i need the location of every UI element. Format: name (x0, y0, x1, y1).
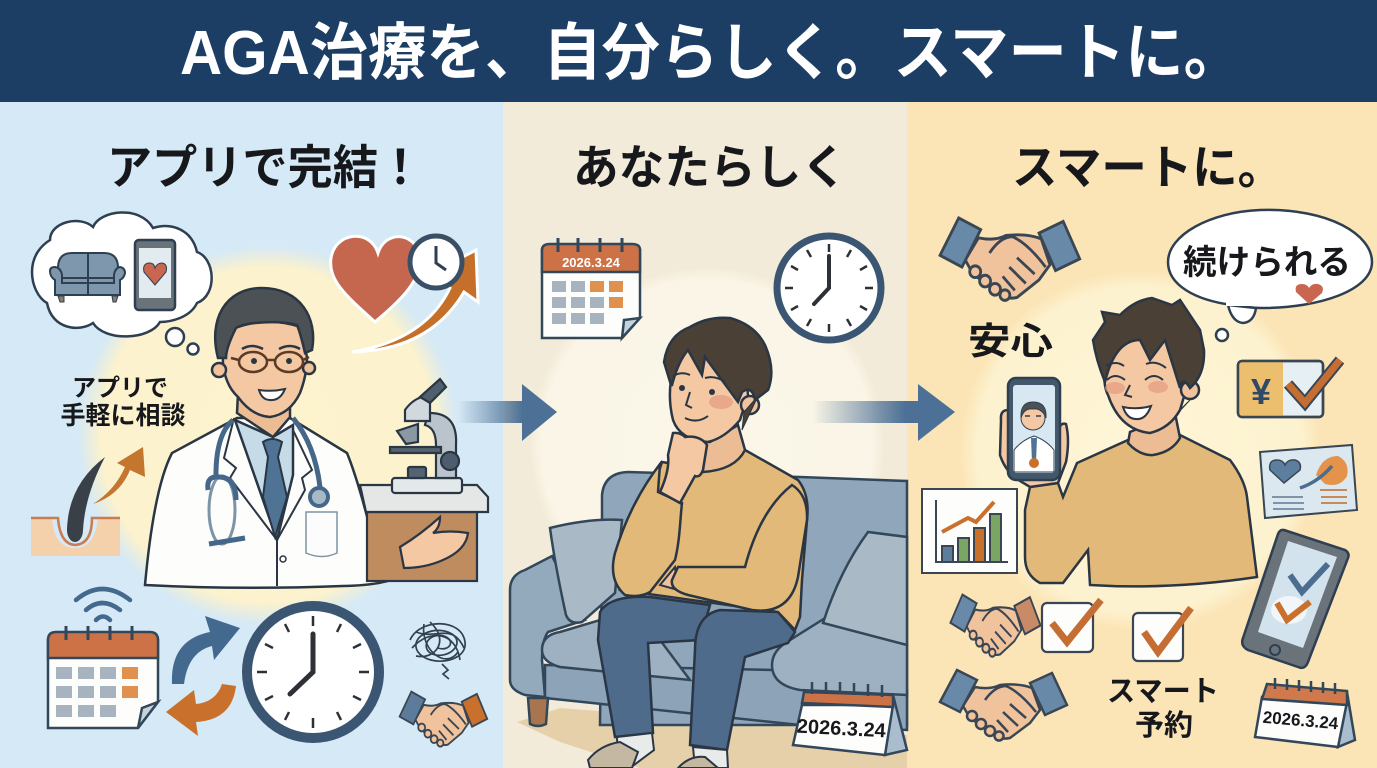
neck (680, 425, 745, 472)
icon: microscope on desk (360, 379, 488, 581)
sweater (620, 450, 808, 630)
shirt (235, 420, 293, 540)
face (1104, 330, 1195, 433)
coat (145, 418, 410, 588)
title banner: AGA治療を、自分らしく。スマートに。 (180, 19, 1242, 88)
hair (215, 288, 313, 358)
icon: calendar middle (542, 238, 640, 338)
socks and slippers (617, 733, 654, 768)
label: smart booking: 予約 (1135, 709, 1193, 742)
label: smart booking (1107, 676, 1219, 742)
icon: lower handshake (940, 670, 1067, 740)
icon: tangled scribble (410, 622, 465, 679)
callout: can continue (1168, 210, 1372, 341)
figure: smiling man with phone (1000, 298, 1257, 586)
icon: heart with clock and rising arrow (331, 236, 478, 352)
icon: calendar middle: 2026.3.24 (562, 255, 621, 270)
callout: app consultation: 手軽に相談 (60, 402, 186, 430)
hand at chin (660, 433, 707, 503)
icon: handshake top right (940, 218, 1080, 300)
facial features (1106, 363, 1166, 397)
panel: right background (907, 102, 1377, 768)
icon: handshake with checkbox (950, 595, 1101, 657)
icon: tent calendar middle (793, 682, 907, 755)
hand (1000, 410, 1068, 487)
icon: wifi signal (76, 589, 130, 620)
icon: calendar bottom left (48, 626, 158, 728)
face (223, 322, 307, 417)
figure: doctor hand (400, 517, 468, 568)
icon: checkbox (1133, 608, 1191, 661)
icon: growth chart (922, 489, 1017, 573)
figure: sofa (510, 472, 907, 730)
icon: tablet with checks (1242, 530, 1349, 668)
panel: left background (0, 102, 503, 768)
stethoscope (216, 420, 233, 480)
title banner (0, 0, 1377, 102)
icon: id card (1260, 445, 1357, 518)
neck (1128, 413, 1180, 455)
icon: thought bubble sofa and phone (32, 212, 212, 354)
icon: cycle arrows (166, 616, 240, 736)
tie (263, 439, 287, 537)
icon: tent calendar middle: 2026.3.24 (796, 716, 887, 742)
neck (237, 393, 290, 437)
icon: large clock (247, 606, 379, 738)
callout: app consultation: アプリで (72, 375, 168, 402)
icon: yen check card: ¥ (1251, 371, 1271, 412)
panel: middle background (503, 102, 907, 768)
face (670, 350, 748, 442)
figure: thinking man (588, 318, 808, 768)
icon: yen check card (1238, 360, 1340, 417)
icon: handshake bottom left (400, 692, 487, 747)
glasses (231, 357, 309, 360)
callout: app consultation (60, 375, 186, 430)
heading: smart: スマートに。 (1012, 141, 1283, 194)
heading: app: アプリで完結！ (107, 141, 423, 194)
hair (664, 318, 771, 402)
icon: tent calendar right (1255, 678, 1355, 747)
heading: your way: あなたらしく (573, 141, 847, 194)
arrow: left to middle (458, 384, 557, 441)
pocket (306, 512, 337, 556)
arrow: middle to right (812, 384, 955, 441)
icon: phone with doctor on screen (1008, 378, 1060, 480)
lapels (224, 422, 312, 586)
icon: clock middle (777, 236, 881, 340)
sweater (1025, 435, 1257, 586)
hair (1093, 298, 1204, 388)
figure: doctor (145, 288, 410, 588)
icon: tent calendar right: 2026.3.24 (1262, 708, 1340, 733)
facial features (679, 385, 685, 391)
callout: can continue: 続けられる (1183, 244, 1351, 282)
jeans (598, 597, 710, 737)
label: smart booking: スマート (1107, 676, 1219, 708)
icon: hair follicle with arrow (31, 447, 145, 556)
label: peace of mind: 安心 (968, 321, 1053, 362)
